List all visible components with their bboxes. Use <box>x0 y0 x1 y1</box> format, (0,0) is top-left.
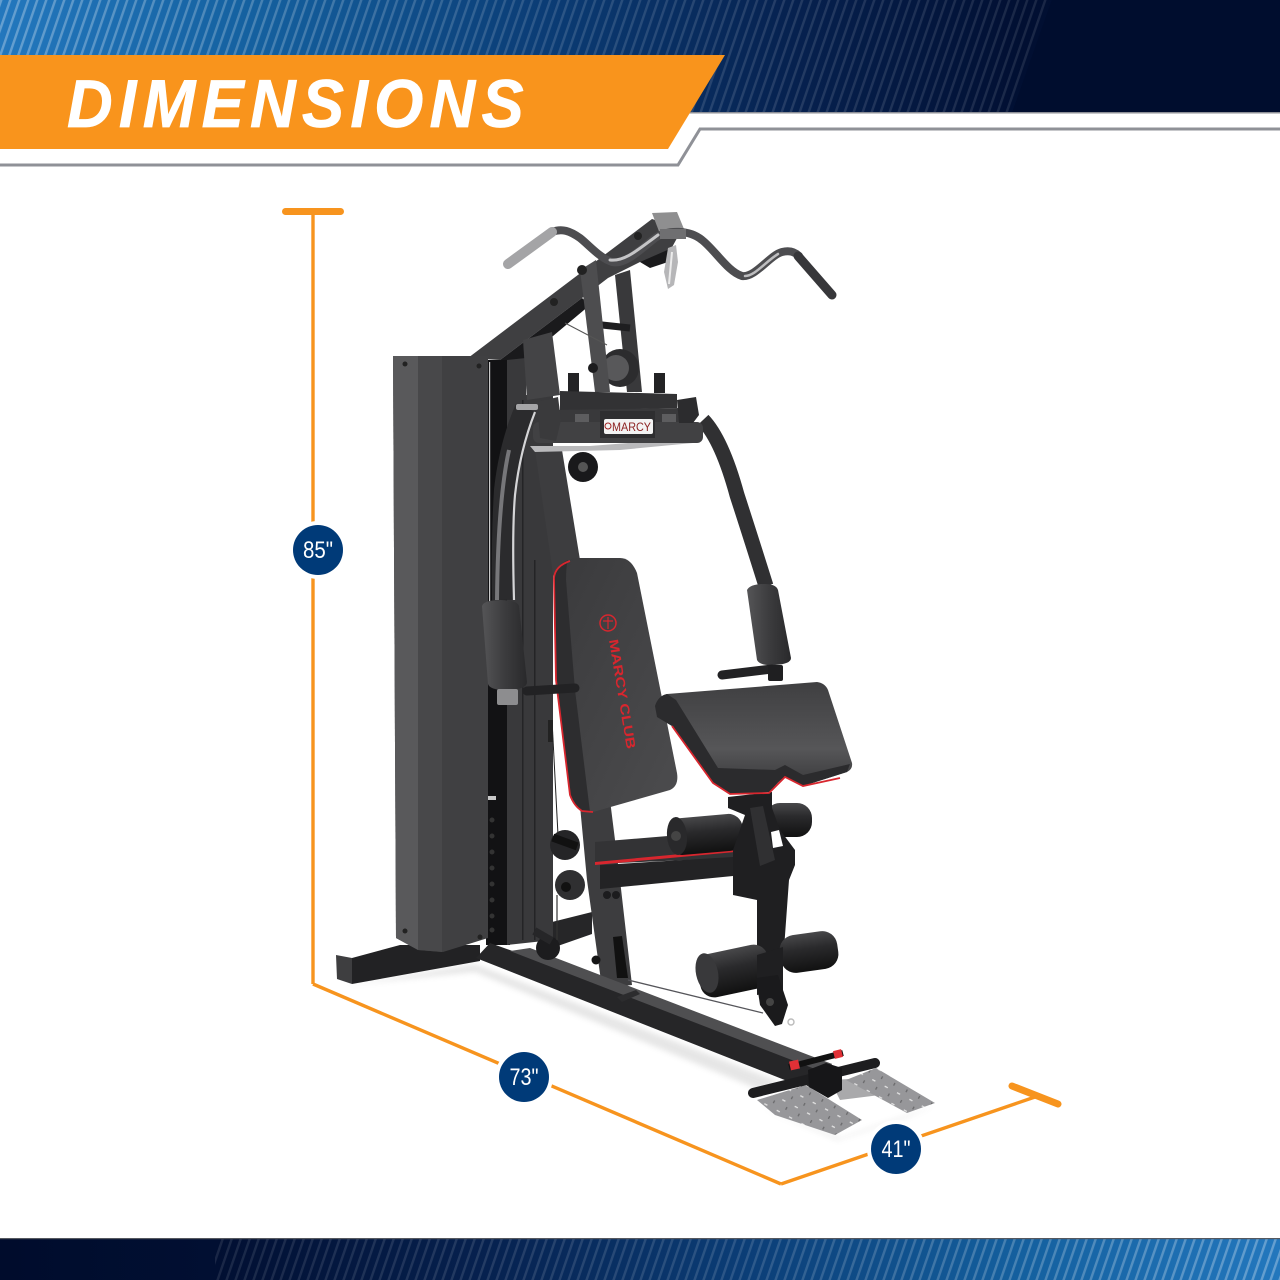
brand text: MARCY CLUB <box>606 638 639 750</box>
seat support post <box>535 450 632 988</box>
left arm pad <box>482 600 575 705</box>
floor shadows <box>345 964 935 1140</box>
carabiner hook <box>660 229 686 289</box>
height line <box>282 208 344 984</box>
lat pulldown bar <box>508 230 832 295</box>
badge: length 73 inches <box>495 1048 553 1106</box>
overhead beam <box>468 212 684 362</box>
badge: width 41 inches: 41" <box>882 1136 910 1163</box>
width line <box>781 1086 1058 1184</box>
rear lower brace <box>552 912 592 948</box>
upper leg roller <box>665 803 812 856</box>
footer band <box>0 1238 1280 1280</box>
seat red trim <box>672 726 840 794</box>
rear crossbar foot <box>336 945 480 984</box>
weight tower shroud <box>393 356 490 952</box>
back pad <box>554 558 677 812</box>
small pulley <box>568 452 598 482</box>
weight stack <box>486 360 510 945</box>
upright posts and pulley <box>565 260 642 392</box>
foot roller bar with red caps <box>753 1053 875 1098</box>
pulldown carriage <box>516 373 703 482</box>
lower post pulley <box>592 936 628 978</box>
centre column <box>507 332 560 945</box>
Marcy label <box>600 411 655 438</box>
seat lower frame <box>595 836 735 889</box>
title: DIMENSIONS <box>67 66 524 141</box>
badge: height 85 inches: 85" <box>303 537 333 564</box>
red trim <box>554 561 593 812</box>
adjustment knobs <box>568 373 579 393</box>
length line <box>313 984 781 1184</box>
dimension lines <box>282 208 1058 1184</box>
main floor beam <box>476 943 832 1090</box>
right arm tube <box>703 420 766 586</box>
header grey rule <box>0 129 1280 165</box>
low pulley and hook <box>756 975 794 1026</box>
foot plates <box>757 1068 935 1135</box>
badge: length 73 inches: 73" <box>510 1064 538 1091</box>
Marcy label: MARCY <box>612 422 651 434</box>
lower leg roller <box>692 929 840 1000</box>
left arm tube <box>497 408 535 600</box>
title banner <box>0 55 725 149</box>
badge: width 41 inches <box>867 1120 925 1178</box>
right arm pad <box>722 584 791 681</box>
cable pulleys <box>532 720 620 960</box>
brand logo <box>600 615 616 631</box>
badge: height 85 inches <box>289 521 347 579</box>
home gym machine <box>336 212 935 1140</box>
cable to low pulley <box>628 980 763 1013</box>
seat pad <box>655 682 852 794</box>
header band <box>0 0 1280 114</box>
leg lever bracket <box>728 792 795 963</box>
